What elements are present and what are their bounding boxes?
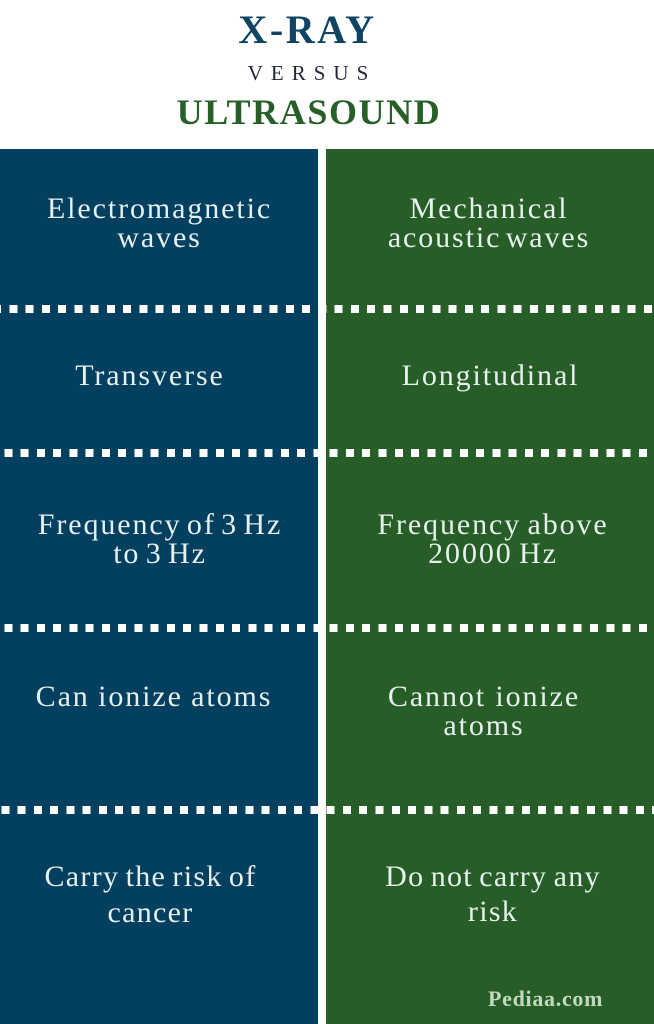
text: frequency of ultrasound [377,508,609,570]
panel: X-ray column [0,149,318,1024]
text: frequency of ultrasound: Frequency above [377,508,609,541]
divider row 1 [0,305,654,313]
text: transverse: Transverse [75,359,225,392]
text: carry the risk of cancer [44,860,257,929]
text: electromagnetic waves: waves [117,221,202,254]
text: cannot ionize atoms [388,680,580,742]
text: electromagnetic waves: Electromagnetic [47,192,272,225]
panel: Ultrasound column [326,149,654,1024]
divider row 3 [0,624,654,632]
text: frequency of x-ray [38,508,282,570]
text: mechanical acoustic waves: acoustic waves [388,221,590,254]
text: cannot ionize atoms: atoms [443,709,525,742]
text: frequency of x-ray: to 3 Hz [113,537,207,570]
text: frequency of x-ray: Frequency of 3 Hz [38,508,282,541]
divider row 4 [0,806,654,814]
text: longitudinal: Longitudinal [402,359,579,392]
text: mechanical acoustic waves [388,192,590,254]
text: do not carry any risk: Do not carry any [385,860,601,893]
logo: Pediaa.com: Pediaa.com [488,986,603,1011]
divider row 2 [0,449,654,457]
title: versus: VERSUS [248,61,376,85]
text: carry the risk of cancer: Carry the risk of [44,860,257,893]
text: do not carry any risk: risk [468,895,518,928]
text: mechanical acoustic waves: Mechanical [410,192,568,225]
text: frequency of ultrasound: 20000 Hz [428,537,558,570]
text: do not carry any risk [385,860,601,928]
text: cannot ionize atoms: Cannot ionize [388,680,580,713]
text: can ionize atoms: Can ionize atoms [36,680,272,713]
text: electromagnetic waves [47,192,272,254]
title: X-Ray: X-RAY [238,7,377,52]
title: Ultrasound: ULTRASOUND [177,92,441,132]
text: carry the risk of cancer: cancer [107,896,194,929]
